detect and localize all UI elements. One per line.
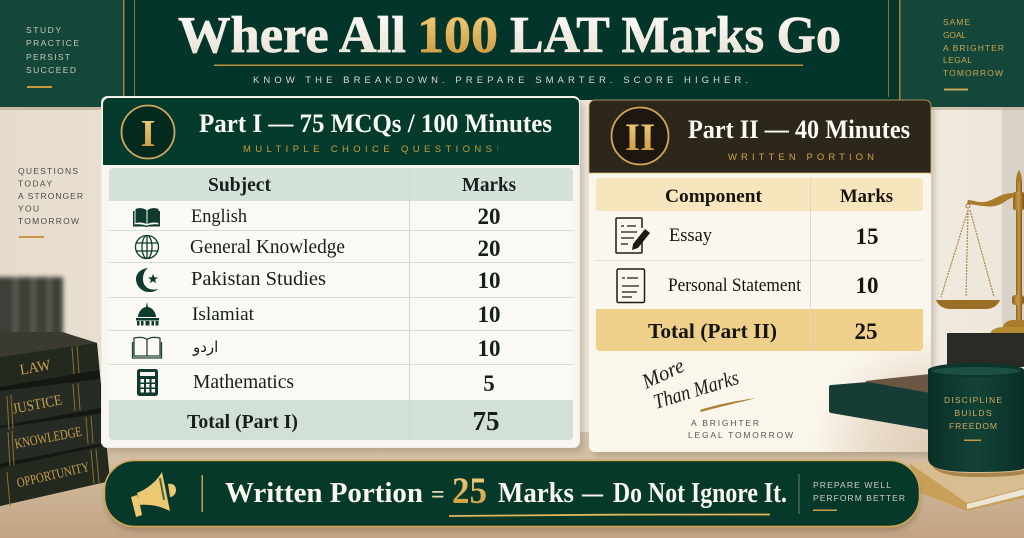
- icon: open book: [133, 208, 160, 227]
- mug text: DISCIPLINE: [944, 395, 1002, 405]
- row: urdu: [132, 336, 500, 361]
- icon: crescent and star: [136, 268, 158, 292]
- tagline: a brighter legal tomorrow: LEGAL TOMORROW: [688, 430, 793, 440]
- table: part II components: [596, 178, 923, 351]
- motto: same goal: LEGAL: [943, 55, 972, 65]
- panel: part I: [102, 96, 584, 452]
- subheading: written portion: WRITTEN PORTION: [728, 152, 874, 163]
- row: islamiat: Islamiat: [192, 304, 255, 325]
- motto: same goal: A BRIGHTER: [943, 43, 1004, 53]
- book label: justice: JUSTICE: [11, 392, 63, 418]
- row: total part I: [187, 406, 500, 436]
- callout text: Do Not Ignore It.: [613, 478, 787, 509]
- row: general knowledge: 20: [478, 236, 500, 261]
- blurred bookshelf: [0, 277, 63, 337]
- motto: study practice: PRACTICE: [26, 38, 79, 48]
- side note: questions today: QUESTIONS: [18, 166, 78, 176]
- row: islamiat: 10: [478, 302, 500, 327]
- tagline: a brighter legal tomorrow: [688, 418, 793, 440]
- title: 100: [417, 7, 498, 64]
- motto: same goal: SAME: [943, 17, 970, 27]
- row: english: 20: [478, 204, 500, 229]
- divider: before side note: [798, 474, 800, 514]
- side note: questions today: [18, 166, 83, 238]
- left green panel: [0, 0, 123, 110]
- book label: knowledge: KNOWLEDGE: [14, 425, 83, 452]
- row: essay: [616, 218, 878, 253]
- side note: questions today: YOU: [18, 204, 39, 214]
- title banner: [123, 0, 900, 100]
- table: part I subjects: [109, 168, 573, 440]
- icon: document and pen: [616, 218, 650, 253]
- row: mathematics: [137, 369, 495, 396]
- icon: globe: [136, 236, 158, 258]
- badge: numeral I: I: [141, 113, 155, 155]
- scales of justice: [936, 170, 1024, 367]
- callout text: [225, 471, 787, 512]
- underline: callout: [449, 514, 770, 516]
- badge: numeral II: [612, 108, 668, 164]
- motto: same goal: GOAL: [943, 30, 966, 40]
- mug: [928, 363, 1024, 477]
- side note: questions today: TOMORROW: [18, 216, 79, 226]
- callout banner: [104, 460, 920, 531]
- row: total part II: 25: [854, 319, 878, 344]
- row: general knowledge: General Knowledge: [190, 237, 345, 258]
- icon: outline book: [132, 337, 162, 358]
- row: personal statement: [617, 269, 878, 302]
- badge: numeral II: II: [625, 116, 655, 159]
- book stack: [0, 332, 110, 506]
- table header: subject: Subject: [208, 175, 271, 196]
- signature: more than marks: Than Marks: [650, 365, 742, 414]
- callout text: Written Portion: [225, 478, 423, 509]
- book under mug: [909, 458, 1024, 511]
- badge: numeral I: [122, 106, 174, 158]
- heading: part II: Part II — 40 Minutes: [688, 115, 910, 144]
- row: mathematics: 5: [483, 371, 495, 396]
- motto: study practice: SUCCEED: [26, 65, 76, 75]
- mug text: BUILDS: [954, 408, 992, 418]
- right green panel: [900, 0, 1024, 110]
- side note: questions today: A STRONGER: [18, 191, 83, 201]
- title: [178, 7, 841, 64]
- side note: prepare well perform better: PREPARE WELL: [813, 480, 891, 490]
- row: essay: 15: [856, 224, 878, 249]
- title: Where All: [178, 7, 406, 64]
- motto: same goal: [943, 17, 1004, 78]
- row: mathematics: Mathematics: [193, 372, 294, 393]
- row: personal statement: 10: [856, 273, 878, 298]
- row: islamiat: [136, 302, 500, 327]
- divider: after megaphone: [202, 475, 203, 512]
- side note: questions today: TODAY: [18, 178, 52, 188]
- subtitle: KNOW THE BREAKDOWN. PREPARE SMARTER. SCORE HIGHER.: [253, 75, 748, 86]
- accent line: right panel: [944, 88, 968, 90]
- desk books behind mug: [829, 374, 930, 430]
- callout text: Marks: [498, 478, 574, 509]
- motto: study practice: PERSIST: [26, 52, 70, 62]
- row: urdu: 10: [478, 336, 500, 361]
- book label: law: LAW: [19, 357, 53, 379]
- row: total part II: [648, 319, 878, 344]
- row: total part II: Total (Part II): [648, 319, 777, 343]
- row: total part I: Total (Part I): [187, 411, 298, 433]
- title: LAT Marks Go: [510, 7, 841, 64]
- icon: calculator: [137, 369, 158, 396]
- row: pakistan studies: Pakistan Studies: [191, 269, 326, 290]
- motto: same goal: TOMORROW: [943, 68, 1003, 78]
- motto: study practice: STUDY: [26, 25, 61, 35]
- part I header: [103, 98, 579, 165]
- row: english: English: [191, 206, 247, 227]
- row: essay: Essay: [669, 226, 713, 246]
- row: urdu: اردو: [192, 338, 218, 356]
- tagline: a brighter legal tomorrow: A BRIGHTER: [691, 418, 759, 428]
- icon: checklist document: [617, 269, 644, 302]
- signature: more than marks: More: [637, 353, 688, 394]
- callout text: —: [581, 478, 603, 509]
- side note: prepare well perform better: PERFORM BETTER: [813, 493, 905, 503]
- row: personal statement: Personal Statement: [668, 276, 802, 296]
- row: general knowledge: [136, 236, 500, 261]
- table header: marks: Marks: [840, 186, 893, 207]
- panel: part II: [589, 100, 935, 456]
- spine bands: [7, 346, 99, 506]
- row: total part I: 75: [472, 406, 500, 436]
- table header: component: Component: [665, 186, 763, 207]
- side note: prepare well perform better: [813, 480, 905, 511]
- accent line: left panel: [27, 86, 52, 88]
- icon: megaphone: [131, 472, 176, 517]
- subheading: multiple choice questions: MULTIPLE CHOICE QUESTIONS !: [243, 144, 499, 155]
- mug text: [944, 395, 1002, 441]
- callout text: =: [431, 482, 445, 508]
- row: pakistan studies: [136, 268, 500, 293]
- table header: marks: Marks: [462, 175, 516, 196]
- mug text: FREEDOM: [949, 421, 997, 431]
- row: english: [133, 204, 500, 229]
- book label: opportunity: OPPORTUNITY: [15, 459, 91, 490]
- callout text: 25: [452, 471, 487, 512]
- motto: study practice: [26, 25, 79, 75]
- heading: part I: Part I — 75 MCQs / 100 Minutes: [199, 109, 552, 138]
- icon: mosque: [136, 302, 159, 326]
- part II header: [589, 100, 931, 173]
- row: pakistan studies: 10: [478, 268, 500, 293]
